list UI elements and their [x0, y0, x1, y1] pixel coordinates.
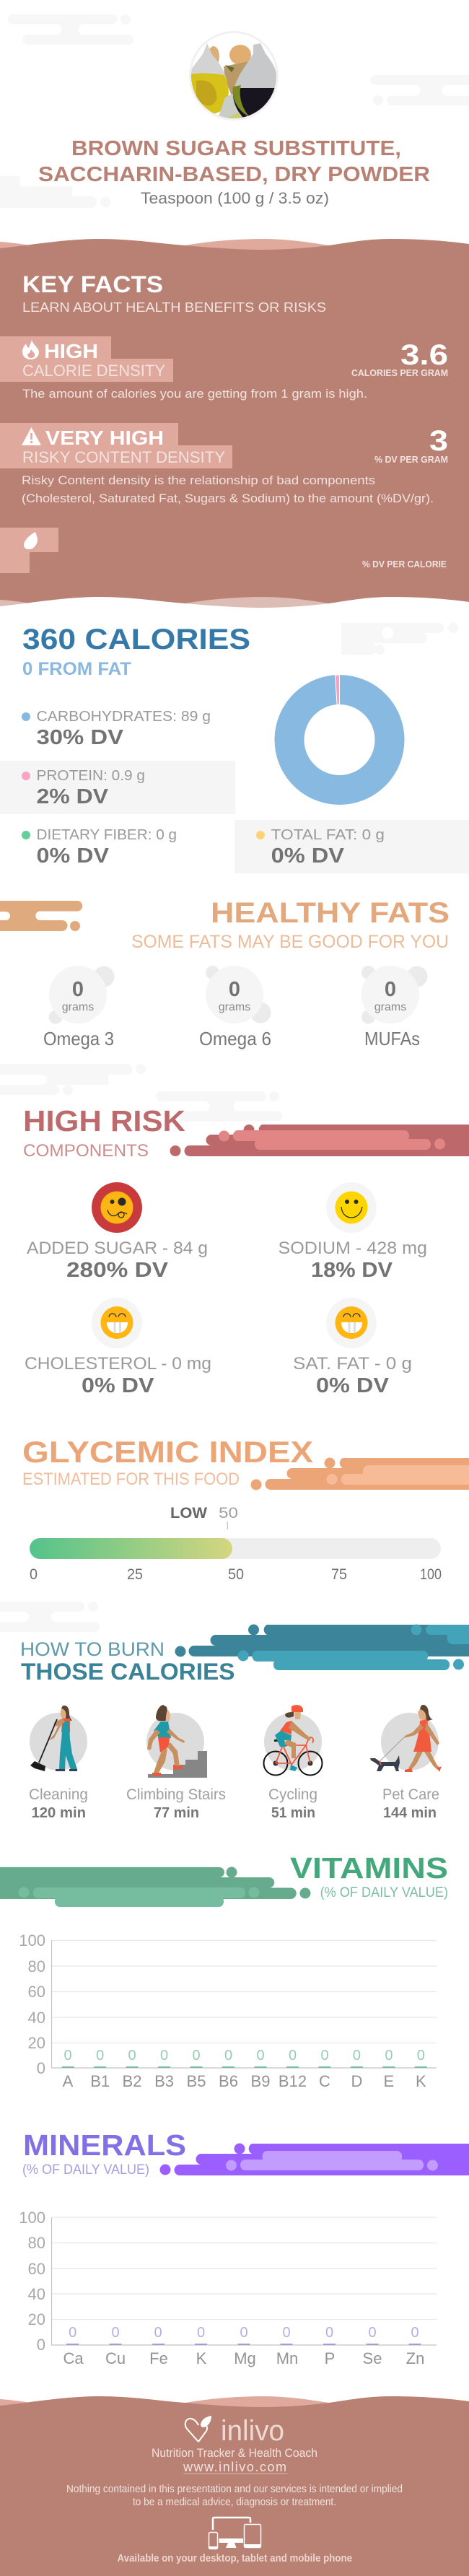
bar chart: vitamins: 0	[160, 2048, 168, 2064]
bar chart: minerals: 0	[111, 2325, 120, 2341]
stat: calories per gram: 3.6	[400, 339, 448, 371]
heading: vitamins: (% OF DAILY VALUE)	[320, 1885, 448, 1900]
row: total fat: TOTAL FAT: 0 g	[271, 827, 385, 843]
bar chart: minerals: Se	[363, 2349, 382, 2367]
bar chart: vitamins: 0	[128, 2048, 136, 2064]
food photo	[189, 31, 279, 123]
panel: minerals	[19, 2129, 469, 2367]
stat: omega 3: grams	[62, 1001, 94, 1013]
bar chart: minerals: 80	[28, 2234, 45, 2252]
bar chart: minerals: Ca	[63, 2349, 84, 2367]
item: cholesterol: 0% DV	[82, 1374, 154, 1397]
heading: key facts: KEY FACTS	[22, 271, 163, 297]
bar chart: vitamins: 0	[224, 2048, 232, 2064]
bar chart: minerals: 0	[368, 2325, 377, 2341]
bar chart: vitamins: 0	[353, 2048, 361, 2064]
activity: cycling	[264, 1705, 322, 1821]
activity: cleaning: Cleaning	[29, 1786, 88, 1803]
heading: glycemic index: GLYCEMIC INDEX	[22, 1435, 313, 1469]
bar chart: vitamins: B5	[187, 2072, 206, 2090]
bar chart: vitamins: K	[416, 2072, 426, 2090]
icon: smile face	[326, 1182, 377, 1233]
bar chart: minerals: 0	[37, 2336, 45, 2354]
activity: cycling: Cycling	[268, 1786, 317, 1803]
bar chart: vitamins: 0	[96, 2048, 104, 2064]
bar chart: vitamins	[19, 1931, 437, 2090]
heading: calories	[22, 624, 250, 679]
stat: calories per gram: CALORIES PER GRAM	[351, 367, 448, 378]
decorative band: green	[0, 1866, 310, 1907]
panel: how to burn those calories	[0, 1602, 469, 1821]
bar chart: minerals: 20	[28, 2310, 45, 2328]
title: SACCHARIN-BASED, DRY POWDER	[38, 163, 430, 186]
serving size: Teaspoon (100 g / 3.5 oz)	[141, 189, 329, 207]
item: saturated fat: 0% DV	[316, 1374, 390, 1397]
heading: minerals	[22, 2129, 186, 2178]
bar chart: vitamins: 80	[28, 1957, 45, 1975]
bar chart: vitamins: 0	[385, 2048, 393, 2064]
disclaimer	[66, 2483, 403, 2508]
gauge: LOW 50: 50	[228, 1566, 244, 1583]
bar chart: minerals: 40	[28, 2285, 45, 2303]
row: carbohydrates: CARBOHYDRATES: 89 g	[36, 709, 211, 725]
bar chart: minerals: 0	[69, 2325, 76, 2341]
row: protein	[0, 761, 235, 814]
row: total fat	[234, 820, 469, 873]
bar chart: vitamins: C	[319, 2072, 330, 2090]
bar chart: vitamins: B2	[123, 2072, 141, 2090]
badge: leaf	[0, 528, 58, 573]
heading: how to burn	[20, 1638, 235, 1685]
icon: flame	[22, 340, 39, 359]
heading: vitamins: VITAMINS	[290, 1851, 448, 1885]
bar chart: minerals: 60	[28, 2260, 45, 2278]
decorative band: orange	[0, 901, 82, 931]
panel: calories	[0, 623, 469, 873]
heading: high risk	[23, 1104, 185, 1161]
item: cholesterol: CHOLESTEROL - 0 mg	[25, 1354, 211, 1374]
bar chart: vitamins: B12	[279, 2072, 307, 2090]
bar chart: minerals	[19, 2209, 437, 2367]
gauge: LOW 50: 100	[420, 1566, 442, 1583]
item: sodium	[279, 1182, 427, 1282]
decorative band: teal	[175, 1624, 469, 1670]
heading: minerals: (% OF DAILY VALUE)	[22, 2162, 149, 2178]
row: protein: 2% DV	[36, 785, 109, 808]
bar chart: minerals: Zn	[406, 2349, 424, 2367]
activity: pet care: Pet Care	[382, 1786, 439, 1803]
tagline: www.inlivo.com	[183, 2460, 286, 2474]
heading: healthy fats	[131, 897, 450, 952]
item: saturated fat: SAT. FAT - 0 g	[293, 1354, 412, 1374]
stat: percent DV per calorie: % DV PER CALORIE	[362, 559, 447, 569]
disclaimer: to be a medical advice, diagnosis or treatment.	[133, 2496, 336, 2508]
bar chart: vitamins: 0	[37, 2059, 45, 2077]
bar chart: vitamins: 0	[63, 2048, 72, 2064]
icon: person walking dog	[370, 1705, 442, 1772]
badge: high calorie density	[0, 336, 173, 382]
icon: person cycling	[264, 1705, 322, 1776]
item: sodium: 18% DV	[311, 1259, 393, 1282]
icon: warning triangle	[22, 427, 41, 445]
gauge: LOW 50: 50	[219, 1505, 238, 1521]
item: sodium: SODIUM - 428 mg	[279, 1239, 427, 1258]
panel: glycemic index	[22, 1435, 469, 1583]
stat: MUFAs: 0	[385, 978, 396, 1001]
text: risky content description: Risky Content density is the relationship of bad components	[22, 473, 375, 487]
bar chart: vitamins: E	[384, 2072, 394, 2090]
heading: high risk: HIGH RISK	[23, 1104, 185, 1138]
stat: omega 6	[199, 966, 271, 1049]
heading: calories: 0 FROM FAT	[22, 659, 131, 679]
text: risky content description: (Cholesterol, Saturated Fat, Sugars & Sodium) to the amount (%DV/gr).	[22, 492, 434, 505]
item: added sugar	[27, 1182, 208, 1282]
bar chart: minerals: Cu	[105, 2349, 126, 2367]
stat: omega 3	[43, 966, 114, 1049]
panel: healthy fats	[0, 897, 450, 1049]
badge: very high risky content density: RISKY CONTENT DENSITY	[22, 448, 225, 466]
panel: header	[39, 31, 430, 206]
bar chart: vitamins: A	[63, 2072, 74, 2090]
activity: climbing stairs: Climbing Stairs	[126, 1786, 226, 1803]
activity: cleaning	[29, 1706, 88, 1821]
bar chart: minerals: 100	[19, 2209, 45, 2227]
bar chart: minerals: Mn	[276, 2349, 298, 2367]
bar chart: vitamins: B6	[219, 2072, 238, 2090]
row: protein: PROTEIN: 0.9 g	[36, 768, 145, 784]
gauge: LOW 50: 25	[127, 1566, 143, 1583]
tagline	[152, 2446, 317, 2474]
decorative band: red	[170, 1125, 469, 1156]
stat: omega 6: grams	[219, 1001, 250, 1013]
bar chart: vitamins: B1	[90, 2072, 110, 2090]
icon: person sweeping	[30, 1706, 77, 1771]
heading: glycemic index: ESTIMATED FOR THIS FOOD	[22, 1470, 240, 1489]
bar chart: vitamins: 0	[256, 2048, 265, 2064]
stat: omega 6: 0	[229, 978, 240, 1001]
row: carbohydrates	[22, 709, 211, 749]
stat: percent DV per gram	[374, 425, 448, 465]
heading: glycemic index	[22, 1435, 313, 1489]
donut chart	[289, 675, 390, 790]
heading: healthy fats: SOME FATS MAY BE GOOD FOR YOU	[131, 932, 449, 952]
disclaimer: Nothing contained in this presentation and our services is intended or implied	[66, 2483, 403, 2495]
gauge: LOW 50: 75	[331, 1566, 347, 1583]
bar chart: minerals: 0	[240, 2325, 248, 2341]
panel: vitamins	[0, 1851, 448, 2090]
logo: inlivo: inlivo	[221, 2415, 284, 2447]
bar chart: minerals: 0	[325, 2325, 333, 2341]
heading: how to burn: HOW TO BURN	[20, 1638, 165, 1660]
heading: high risk: COMPONENTS	[23, 1141, 149, 1161]
bar chart: vitamins: 0	[192, 2048, 201, 2064]
stat: MUFAs: grams	[374, 1001, 406, 1013]
heading: calories: 360 CALORIES	[22, 624, 250, 655]
gauge: LOW 50	[30, 1505, 442, 1583]
stat: percent DV per gram: 3	[429, 425, 448, 457]
tagline: Nutrition Tracker & Health Coach	[152, 2446, 317, 2460]
heading: how to burn: THOSE CALORIES	[21, 1659, 235, 1685]
bar chart: vitamins: D	[351, 2072, 362, 2090]
availability note: Available on your desktop, tablet and mobile phone	[117, 2552, 352, 2564]
row: dietary fiber: DIETARY FIBER: 0 g	[36, 827, 177, 843]
item: added sugar: ADDED SUGAR - 84 g	[27, 1239, 208, 1258]
icon: leaf	[24, 532, 38, 549]
bar chart: minerals: Mg	[234, 2349, 256, 2367]
bar chart: vitamins: 0	[289, 2048, 297, 2064]
stat: percent DV per gram: % DV PER GRAM	[374, 454, 448, 465]
item: saturated fat	[293, 1298, 412, 1397]
panel: high risk components	[0, 1064, 469, 1397]
heading: key facts: LEARN ABOUT HEALTH BENEFITS OR RISKS	[22, 300, 326, 315]
stat: omega 3: 0	[72, 978, 84, 1001]
decorative band: purple	[160, 2144, 469, 2175]
badge: very high risky content density: VERY HIGH	[45, 427, 164, 449]
row: dietary fiber: 0% DV	[36, 844, 110, 868]
panel: key facts	[0, 239, 469, 625]
stat: MUFAs	[361, 966, 427, 1049]
bar chart: vitamins: B3	[154, 2072, 174, 2090]
stat: omega 6: Omega 6	[199, 1028, 271, 1049]
icon: devices	[209, 2518, 261, 2549]
bar chart: minerals: 0	[154, 2325, 162, 2341]
bar chart: vitamins: 60	[28, 1983, 45, 2001]
activity: climbing stairs	[126, 1705, 226, 1821]
badge: high calorie density: CALORIE DENSITY	[22, 362, 165, 380]
gauge: LOW 50: 0	[30, 1566, 38, 1583]
bar chart: vitamins: 0	[320, 2048, 329, 2064]
item: cholesterol	[25, 1298, 211, 1397]
activity: pet care: 144 min	[383, 1805, 437, 1821]
title: BROWN SUGAR SUBSTITUTE,	[71, 137, 401, 160]
row: dietary fiber	[22, 827, 177, 868]
stat: MUFAs: MUFAs	[364, 1028, 420, 1049]
heading: healthy fats: HEALTHY FATS	[211, 897, 450, 929]
icon: grin face	[92, 1298, 142, 1348]
bar chart: vitamins: B9	[251, 2072, 270, 2090]
bar chart: minerals: K	[196, 2349, 207, 2367]
text: calorie density description: The amount of calories you are getting from 1 gram is high.	[22, 387, 367, 401]
bar chart: vitamins: 0	[417, 2048, 425, 2064]
icon: person on stairs	[147, 1705, 207, 1778]
bar chart: vitamins: 40	[28, 2009, 45, 2027]
bar chart: minerals: 0	[411, 2325, 419, 2341]
stat: calories per gram	[351, 339, 448, 378]
activity: cleaning: 120 min	[32, 1805, 86, 1821]
bar chart: minerals: 0	[197, 2325, 205, 2341]
icon: grin face	[326, 1298, 377, 1348]
icon: tongue face	[92, 1182, 142, 1233]
activity: pet care	[370, 1705, 442, 1821]
bar chart: minerals: P	[325, 2349, 335, 2367]
logo: inlivo	[185, 2415, 284, 2447]
bar chart: vitamins: 100	[19, 1931, 45, 1950]
row: carbohydrates: 30% DV	[36, 726, 124, 749]
gauge: LOW 50: LOW	[170, 1505, 207, 1521]
text: risky content description	[22, 473, 434, 505]
title	[38, 137, 430, 186]
row: total fat: 0% DV	[271, 844, 345, 868]
bar chart: minerals: Fe	[149, 2349, 168, 2367]
bar chart: vitamins: 20	[28, 2034, 45, 2052]
heading: vitamins	[290, 1851, 448, 1900]
decorative band: orange	[251, 1458, 469, 1490]
badge: high calorie density: HIGH	[44, 340, 98, 362]
badge: very high risky content density	[0, 423, 232, 468]
stat: omega 3: Omega 3	[43, 1028, 114, 1049]
activity: cycling: 51 min	[271, 1805, 315, 1821]
item: added sugar: 280% DV	[66, 1259, 169, 1282]
bar chart: minerals: 0	[282, 2325, 291, 2341]
heading: key facts	[22, 271, 326, 315]
activity: climbing stairs: 77 min	[154, 1805, 199, 1821]
heading: minerals: MINERALS	[23, 2129, 186, 2162]
panel: footer	[0, 2396, 469, 2576]
